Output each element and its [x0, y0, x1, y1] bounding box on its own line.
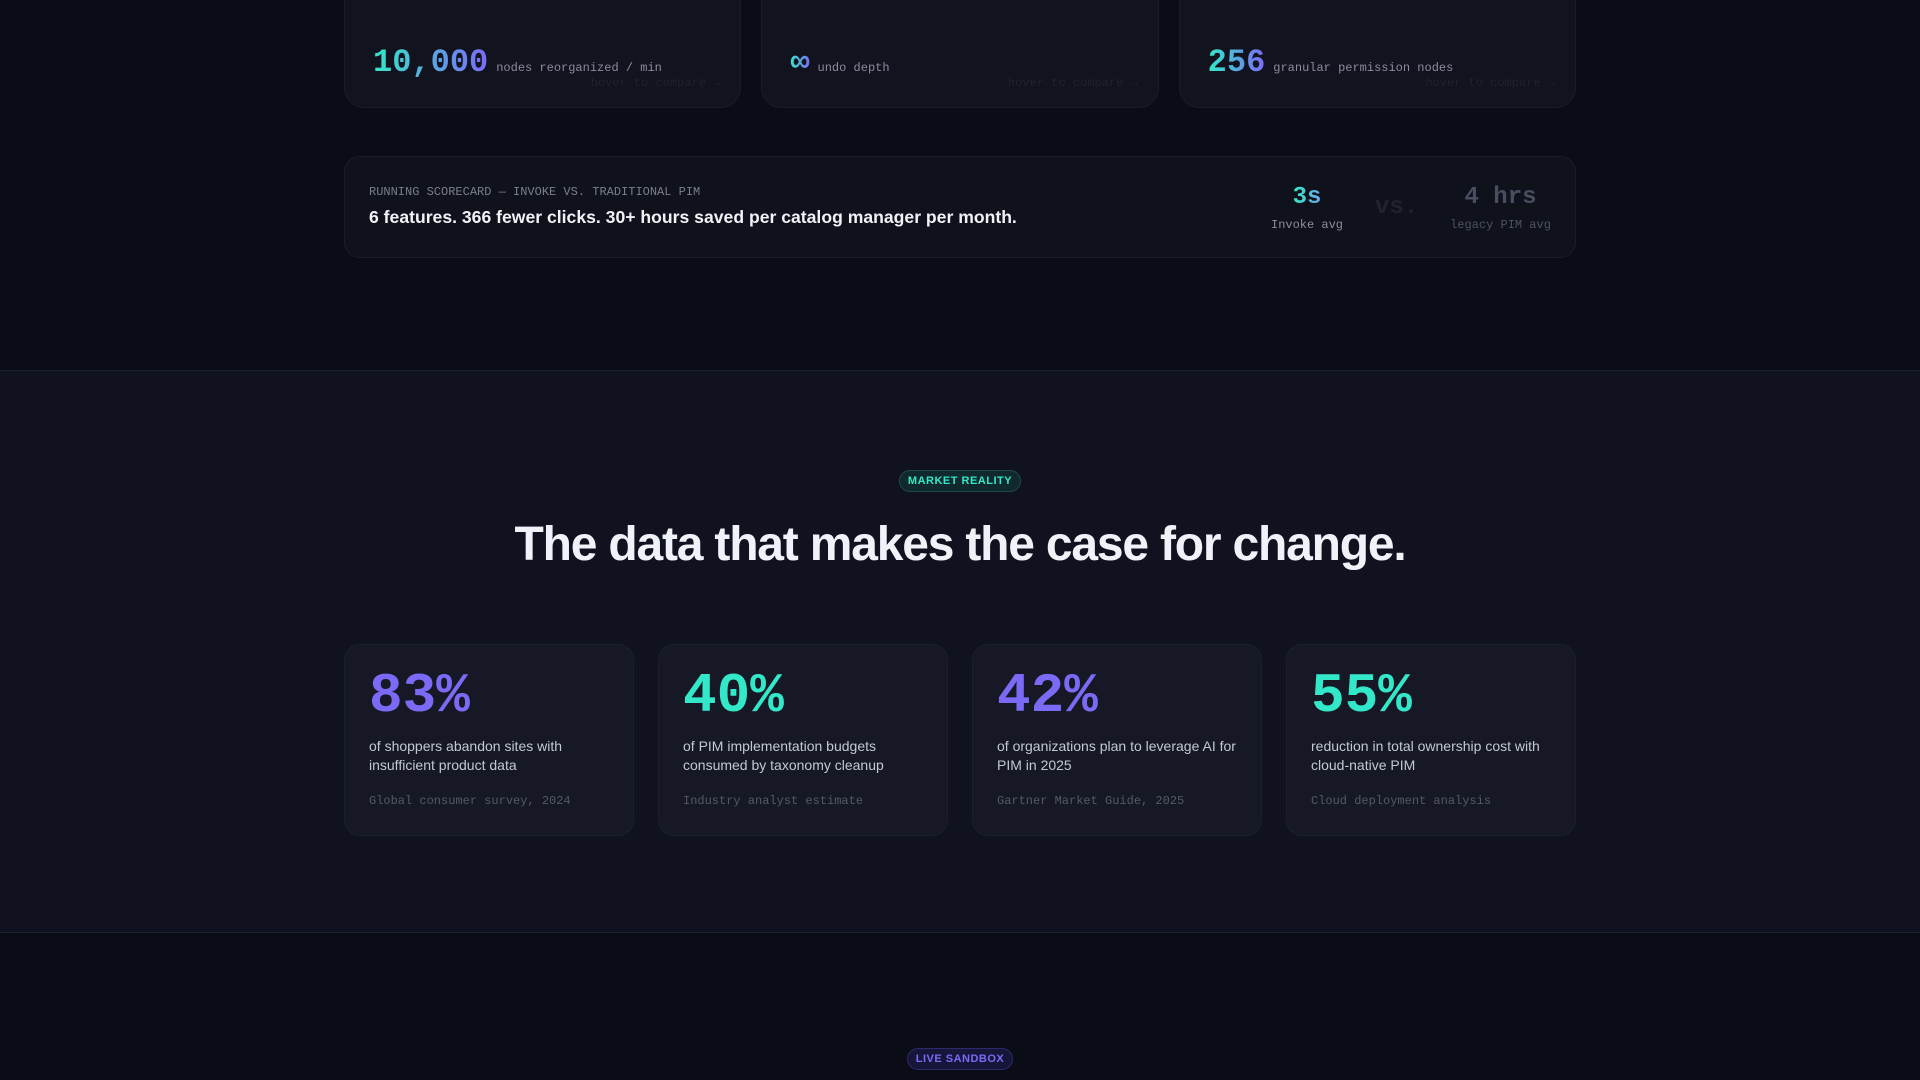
- panel: feature card, permissions: [1179, 0, 1576, 108]
- stat card: 42%: [972, 644, 1262, 836]
- panel: running scorecard: [344, 156, 1576, 258]
- badge: live sandbox: [907, 1048, 1013, 1070]
- badge: market reality: MARKET REALITY: [908, 475, 1012, 487]
- stat card: 40%: [658, 644, 948, 836]
- source: Industry analyst estimate: [683, 794, 863, 808]
- description: of organizations plan to leverage AI for PIM in 2025: [997, 738, 1236, 773]
- hint: hover to compare: hover to compare →: [1008, 76, 1138, 90]
- scorecard label: RUNNING SCORECARD — INVOKE VS. TRADITIONAL PIM: [369, 185, 700, 199]
- badge: live sandbox: LIVE SANDBOX: [916, 1053, 1004, 1065]
- value: 83%: [369, 664, 470, 728]
- legacy average: legacy PIM avg: [1450, 218, 1551, 232]
- panel: feature card, nodes reorganized: [344, 0, 741, 108]
- hint: hover to compare: hover to compare →: [1425, 76, 1555, 90]
- scorecard summary: 6 features. 366 fewer clicks. 30+ hours saved per catalog manager per month.: [369, 207, 1017, 227]
- metric: 256 permission nodes: granular permission nodes: [1273, 61, 1453, 75]
- description: of PIM implementation budgets consumed by taxonomy cleanup: [683, 738, 884, 773]
- invoke average: Invoke avg: [1271, 218, 1343, 232]
- value: 40%: [683, 664, 784, 728]
- metric: 256 permission nodes: 256: [1208, 44, 1265, 81]
- stat card: 55%: [1286, 644, 1576, 836]
- value: 55%: [1311, 664, 1412, 728]
- value: 42%: [997, 664, 1098, 728]
- metric: 10,000 nodes: nodes reorganized / min: [496, 61, 662, 75]
- legacy average: [1450, 184, 1551, 232]
- stat card: 83%: [344, 644, 634, 836]
- metric: 256 permission nodes: [1208, 44, 1453, 81]
- metric: infinite undo: ∞: [790, 44, 810, 81]
- badge: market reality: [899, 470, 1021, 492]
- description: of shoppers abandon sites with insufficient product data: [369, 738, 562, 773]
- metric: infinite undo: undo depth: [818, 61, 890, 75]
- invoke average: [1271, 184, 1343, 232]
- source: Gartner Market Guide, 2025: [997, 794, 1184, 808]
- hint: hover to compare: hover to compare →: [591, 76, 720, 90]
- source: Global consumer survey, 2024: [369, 794, 571, 808]
- metric: 10,000 nodes: 10,000: [373, 44, 488, 81]
- section: market reality: [0, 370, 1920, 933]
- vs separator: vs.: [1375, 194, 1418, 221]
- metric: infinite undo: [790, 44, 890, 81]
- source: Cloud deployment analysis: [1311, 794, 1491, 808]
- invoke average: 3s: [1293, 184, 1321, 211]
- metric: 10,000 nodes: [373, 44, 662, 81]
- heading: The data that makes the case for change.: [514, 518, 1405, 571]
- description: reduction in total ownership cost with cloud-native PIM: [1311, 738, 1540, 773]
- panel: feature card, undo depth: [761, 0, 1159, 108]
- legacy average: 4 hrs: [1464, 184, 1536, 211]
